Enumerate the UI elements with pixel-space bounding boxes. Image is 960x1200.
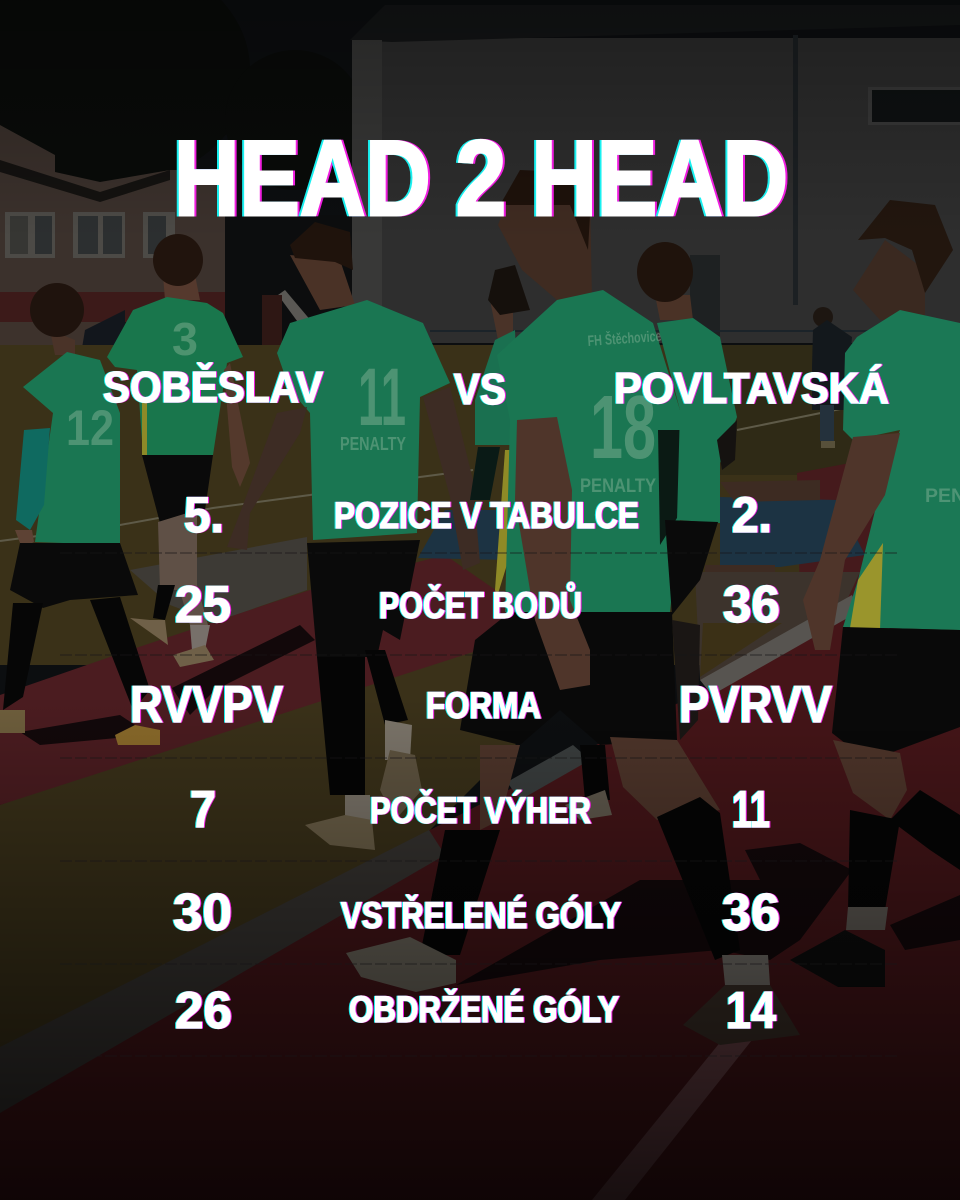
shirt number 18: 18: [590, 378, 656, 478]
player centre, number 18: [346, 170, 800, 1045]
distant spectator: [812, 307, 852, 448]
row label: POZICE V TABULCE: [334, 495, 639, 536]
home value: RVVPV: [130, 676, 283, 734]
player shadows on track: [20, 625, 960, 985]
home value: 25: [175, 576, 231, 634]
row: obdržené góly: [175, 982, 776, 1040]
shirt team name: FH Štěchovice: [587, 327, 662, 350]
player far left, number 12: [0, 283, 160, 745]
row label: POČET BODŮ: [379, 581, 582, 626]
home value: 26: [175, 982, 232, 1040]
row: vstřelené góly: [173, 884, 780, 942]
background: running track: [0, 463, 960, 1200]
away value: 36: [722, 884, 780, 942]
player centre left, number 11: [227, 222, 480, 850]
row label: FORMA: [426, 685, 541, 726]
background: track lane line: [592, 1040, 752, 1200]
background: upper grass: [0, 345, 960, 665]
row: počet bodů: [175, 576, 780, 634]
player right of centre: [565, 242, 737, 820]
team: Povltavská: POVLTAVSKÁ: [614, 363, 889, 413]
shirt number 12: 12: [66, 400, 114, 456]
away value: 14: [726, 982, 776, 1040]
background: lower grass: [0, 640, 560, 1050]
row label: POČET VÝHER: [370, 789, 591, 831]
shirt sponsor: PENALTY: [580, 476, 656, 497]
shirt sponsor: PENALTY: [340, 434, 406, 454]
away value: 2.: [732, 487, 772, 543]
row: forma: [130, 676, 832, 734]
away value: PVRVV: [679, 676, 832, 734]
background: hall: [350, 5, 960, 343]
home value: 30: [173, 884, 232, 942]
shirt number 3: 3: [172, 313, 198, 365]
background: track kerb: [0, 595, 858, 1113]
row label: VSTŘELENÉ GÓLY: [341, 894, 621, 936]
away value: 11: [732, 781, 770, 839]
player behind centre: [470, 265, 530, 597]
background: left building: [0, 125, 225, 367]
shirt number 11: 11: [358, 352, 406, 443]
background: pitch lines: [0, 405, 860, 541]
row: pozice v tabulce: [184, 487, 772, 543]
player far right: [790, 200, 960, 987]
background: trees: [0, 0, 365, 190]
vs label: VS: [454, 365, 506, 414]
background: blue long-jump surface: [418, 497, 865, 567]
background: concrete path: [130, 537, 307, 622]
row: počet výher: [190, 781, 770, 839]
title: HEAD 2 HEAD: [174, 118, 788, 238]
home value: 5.: [184, 487, 224, 543]
background: dark gap between buildings: [225, 215, 353, 365]
row label: OBDRŽENÉ GÓLY: [349, 988, 619, 1030]
away value: 36: [723, 576, 780, 634]
background: wooden boards: [705, 480, 820, 572]
background: paving and grass wedge: [695, 572, 860, 680]
teams header: [103, 362, 889, 414]
table row dividers: [60, 553, 900, 1056]
player second left, number 3: [107, 234, 250, 667]
team: Soběslav: SOBĚSLAV: [103, 362, 324, 412]
home value: 7: [190, 781, 216, 839]
